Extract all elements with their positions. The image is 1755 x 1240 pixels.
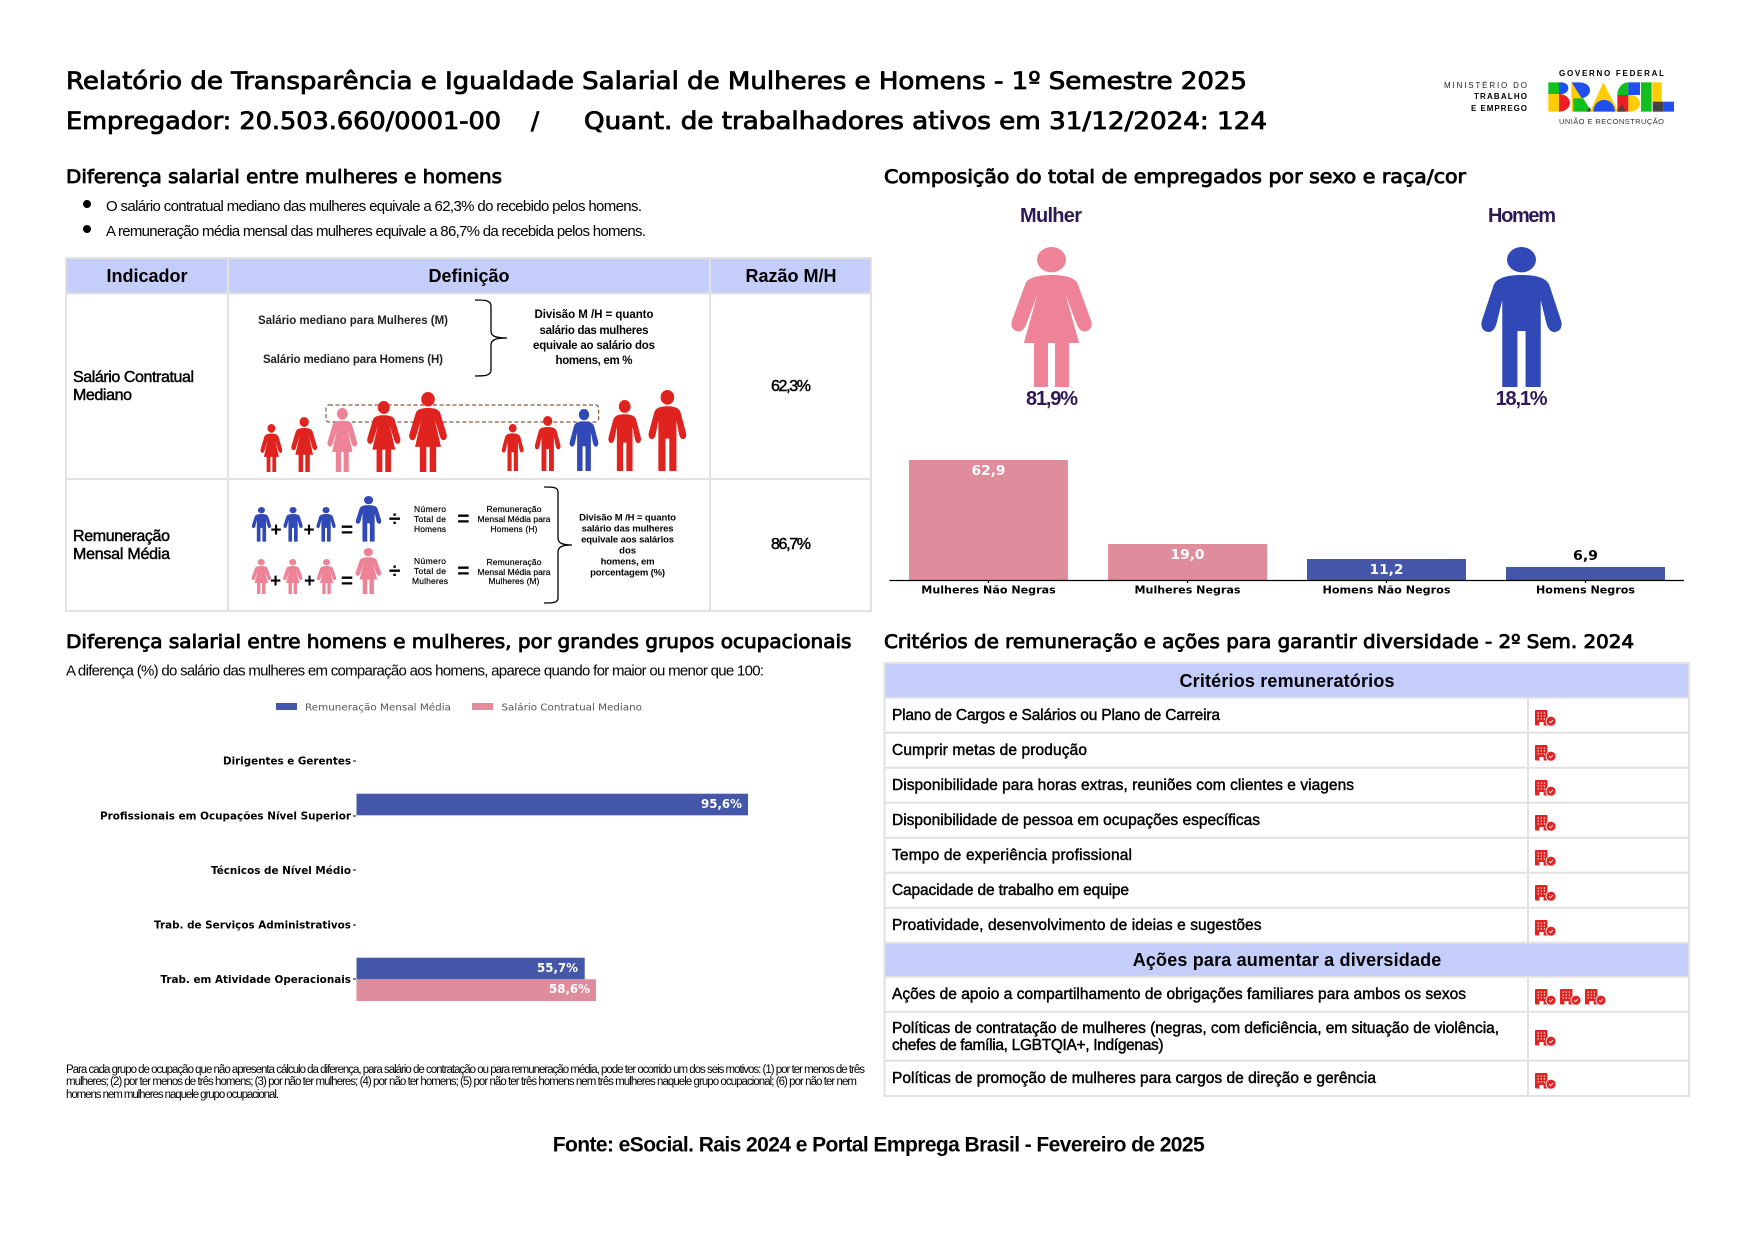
definition: remuneração média (544, 487, 676, 603)
logo: governo federal brasil: UNIÃO E RECONSTRUÇÃO (1559, 117, 1664, 126)
row: experiência: Tempo de experiência profissional (892, 847, 1132, 864)
definition: remuneração média: equivale aos salários (581, 534, 674, 546)
definition: remuneração média: salário das mulheres (582, 524, 674, 534)
definition: salário mediano: Salário mediano para Homens (H) (263, 354, 443, 366)
table: critérios e ações (884, 663, 1689, 1096)
heading: grupos ocupacionais: Diferença salarial entre homens e mulheres, por grandes grupos ocupacionais (66, 631, 852, 653)
definition: salário mediano: equivale ao salário dos (533, 340, 655, 352)
panel: mulher: 81,9% (1026, 388, 1078, 410)
row label: salário contratual mediano: Mediano (73, 387, 132, 404)
panel: homem (1481, 205, 1562, 410)
formula: homens: Número (414, 504, 446, 514)
row: metas (892, 742, 1556, 761)
subheader: critérios remuneratórios: Critérios remuneratórios (1180, 671, 1394, 691)
row label: remuneração mensal média (73, 528, 170, 563)
bullet list: key ratios (83, 198, 646, 240)
bar chart: grupos ocupacionais: Trab. em Atividade Operacionais (160, 974, 351, 986)
bar chart: composição por raça/cor: Mulheres Negras (1134, 584, 1240, 596)
row: proatividade (892, 917, 1556, 936)
logo: ministério do trabalho e emprego: MINISTÉRIO DO (1444, 81, 1527, 90)
title: Quant. de trabalhadores ativos em 31/12/2024: 124 (584, 107, 1267, 135)
formula: mulheres: = (457, 560, 470, 583)
formula: homens: ÷ (389, 508, 401, 531)
definition: salário mediano: Salário mediano para Mulheres (M) (258, 315, 448, 327)
heading: critérios: Critérios de remuneração e ações para garantir diversidade - 2º Sem. 2024 (884, 631, 1634, 653)
row: experiência (892, 847, 1556, 866)
bullet list: key ratios: O salário contratual mediano das mulheres equivale a 62,3% do recebido pelos homens. (106, 198, 642, 215)
bar chart: composição por raça/cor: Homens Negros (1536, 584, 1635, 596)
bar chart: grupos ocupacionais: 55,7% (537, 961, 578, 975)
row: ocupações específicas (892, 812, 1556, 831)
definition: salário mediano: homens, em % (556, 355, 632, 367)
people: women sorted by salary (260, 392, 447, 472)
row: plano de cargos: Plano de Cargos e Salários ou Plano de Carreira (892, 707, 1220, 724)
formula: mulheres (252, 548, 551, 594)
row: equipe: Capacidade de trabalho em equipe (892, 882, 1129, 899)
row label: remuneração mensal média: Mensal Média (73, 546, 170, 563)
bar chart: composição por raça/cor: 19,0 (1170, 548, 1204, 563)
bar chart: composição por raça/cor (890, 460, 1684, 596)
row: horas extras: Disponibilidade para horas extras, reuniões com clientes e viagens (892, 777, 1354, 794)
heading: diferença salarial: Diferença salarial entre mulheres e homens (66, 166, 502, 188)
subheader: ações: Ações para aumentar a diversidade (1133, 950, 1441, 970)
row label: salário contratual mediano (73, 369, 194, 404)
people: men sorted by salary (502, 390, 686, 471)
formula: homens: Homens (H) (490, 524, 538, 534)
formula: mulheres: Remuneração (486, 557, 542, 567)
legend (276, 702, 642, 714)
bar chart: composição por raça/cor: 62,9 (972, 464, 1006, 479)
row: horas extras (892, 777, 1556, 796)
formula: mulheres: + (304, 571, 315, 592)
formula: mulheres: Mensal Média para (478, 567, 551, 577)
table header: Razão M/H (746, 266, 836, 286)
formula: homens: = (341, 519, 353, 542)
table: indicador, definição, razão (66, 258, 871, 611)
definition: remuneração média: dos (619, 546, 636, 556)
bar chart: grupos ocupacionais (100, 756, 748, 1001)
median dashed box (326, 405, 599, 422)
formula: homens (252, 496, 551, 542)
definition: remuneração média: homens, em (601, 556, 655, 568)
footnote: homens nem mulheres naquele grupo ocupacional. (66, 1089, 279, 1101)
legend: Remuneração Mensal Média (305, 702, 451, 714)
logo: governo federal brasil (1548, 69, 1674, 126)
formula: homens: + (303, 520, 315, 541)
row: equipe (892, 882, 1556, 901)
row: contratação: Políticas de contratação de mulheres (negras, com deficiência, em situação de violência, (892, 1020, 1499, 1037)
bar chart: grupos ocupacionais: Profissionais em Ocupações Nível Superior (100, 810, 352, 822)
value: 62,3%: 62,3% (771, 378, 811, 395)
formula: mulheres: Número (414, 556, 446, 566)
formula: mulheres: = (341, 570, 353, 593)
row: metas: Cumprir metas de produção (892, 742, 1087, 759)
formula: homens: Total de (414, 514, 446, 524)
footnote (66, 1064, 865, 1101)
value: 86,7%: 86,7% (771, 536, 811, 553)
bar chart: grupos ocupacionais: Trab. de Serviços Administrativos (154, 920, 351, 932)
bar chart: grupos ocupacionais: 58,6% (549, 982, 590, 996)
panel: homem: 18,1% (1496, 388, 1548, 410)
title (66, 67, 1267, 135)
title: Relatório de Transparência e Igualdade Salarial de Mulheres e Homens - 1º Semestre 2025 (66, 67, 1247, 95)
table header: Definição (428, 266, 510, 286)
row: plano de cargos (892, 707, 1556, 726)
row label: salário contratual mediano: Salário Contratual (73, 369, 194, 386)
panel: mulher: Mulher (1020, 205, 1082, 227)
bar chart: grupos ocupacionais: Dirigentes e Gerentes (223, 756, 351, 768)
definition: remuneração média: Divisão M /H = quanto (579, 512, 676, 524)
bar chart: composição por raça/cor: 11,2 (1370, 563, 1404, 578)
definition: salário mediano (258, 300, 655, 376)
row: proatividade: Proatividade, desenvolvimento de ideias e sugestões (892, 917, 1262, 934)
row: obrigações familiares: Ações de apoio a compartilhamento de obrigações familiares para ambos os sexos (892, 986, 1466, 1003)
bar chart: composição por raça/cor: Homens Não Negros (1322, 584, 1450, 596)
formula: homens: Homens (414, 524, 446, 534)
row label: remuneração mensal média: Remuneração (73, 528, 170, 545)
formula: homens: Mensal Média para (478, 514, 551, 524)
bar chart: composição por raça/cor: 6,9 (1573, 549, 1598, 564)
formula: mulheres: Mulheres (M) (488, 576, 540, 586)
footnote: Para cada grupo de ocupação que não apresenta cálculo da diferença, para salário de contratação ou para remuneração média, pode ter ocorrido um dos seis motivos: (1) por ter menos de três (66, 1064, 865, 1076)
formula: mulheres: Total de (414, 566, 446, 576)
formula: mulheres: Mulheres (412, 576, 448, 586)
logo: ministério do trabalho e emprego (1444, 81, 1527, 113)
panel: mulher (1011, 205, 1092, 410)
bar chart: grupos ocupacionais: Técnicos de Nível Médio (211, 865, 351, 877)
formula: homens: Remuneração (486, 504, 542, 514)
panel: homem: Homem (1488, 205, 1556, 227)
row: ocupações específicas: Disponibilidade de pessoa em ocupações específicas (892, 812, 1260, 829)
row: contratação (892, 1020, 1556, 1054)
footnote: mulheres; (2) por ter menos de três homens; (3) por não ter mulheres; (4) por não ter homens; (5) por não ter três homens nem três mulheres naquele grupo ocupacional; (6) por não ter nem (66, 1076, 857, 1088)
definition: salário mediano: salário das mulheres (540, 325, 648, 337)
logo: governo federal brasil: GOVERNO FEDERAL (1559, 69, 1664, 78)
formula: homens: + (270, 520, 282, 541)
row: contratação: chefes de família, LGBTQIA+, Indígenas) (892, 1037, 1164, 1054)
logo: ministério do trabalho e emprego: E EMPREGO (1471, 104, 1527, 113)
title: / (531, 107, 540, 135)
source note: Fonte: eSocial. Rais 2024 e Portal Emprega Brasil - Fevereiro de 2025 (553, 1134, 1205, 1157)
formula: homens: = (457, 508, 470, 531)
bullet list: key ratios: A remuneração média mensal das mulheres equivale a 86,7% da recebida pelos homens. (106, 223, 646, 240)
bar chart: grupos ocupacionais: 95,6% (701, 797, 742, 811)
formula: mulheres: ÷ (389, 560, 401, 583)
title: Empregador: 20.503.660/0001-00 (66, 107, 501, 135)
legend: Salário Contratual Mediano (502, 702, 642, 714)
definition: salário mediano: Divisão M /H = quanto (534, 309, 654, 321)
definition: remuneração média: porcentagem (%) (590, 568, 665, 578)
logo: ministério do trabalho e emprego: TRABALHO (1474, 92, 1527, 101)
formula: mulheres: + (270, 571, 281, 592)
row: promoção (892, 1070, 1556, 1089)
bar chart: composição por raça/cor: Mulheres Não Negras (921, 584, 1056, 596)
subtitle: nota do gráfico: A diferença (%) do salário das mulheres em comparação aos homens, aparece quando for maior ou menor que 100: (66, 662, 764, 680)
heading: composição: Composição do total de empregados por sexo e raça/cor (884, 166, 1466, 188)
table header: Indicador (106, 266, 188, 286)
row: promoção: Políticas de promoção de mulheres para cargos de direção e gerência (892, 1070, 1376, 1087)
table header (66, 259, 871, 293)
